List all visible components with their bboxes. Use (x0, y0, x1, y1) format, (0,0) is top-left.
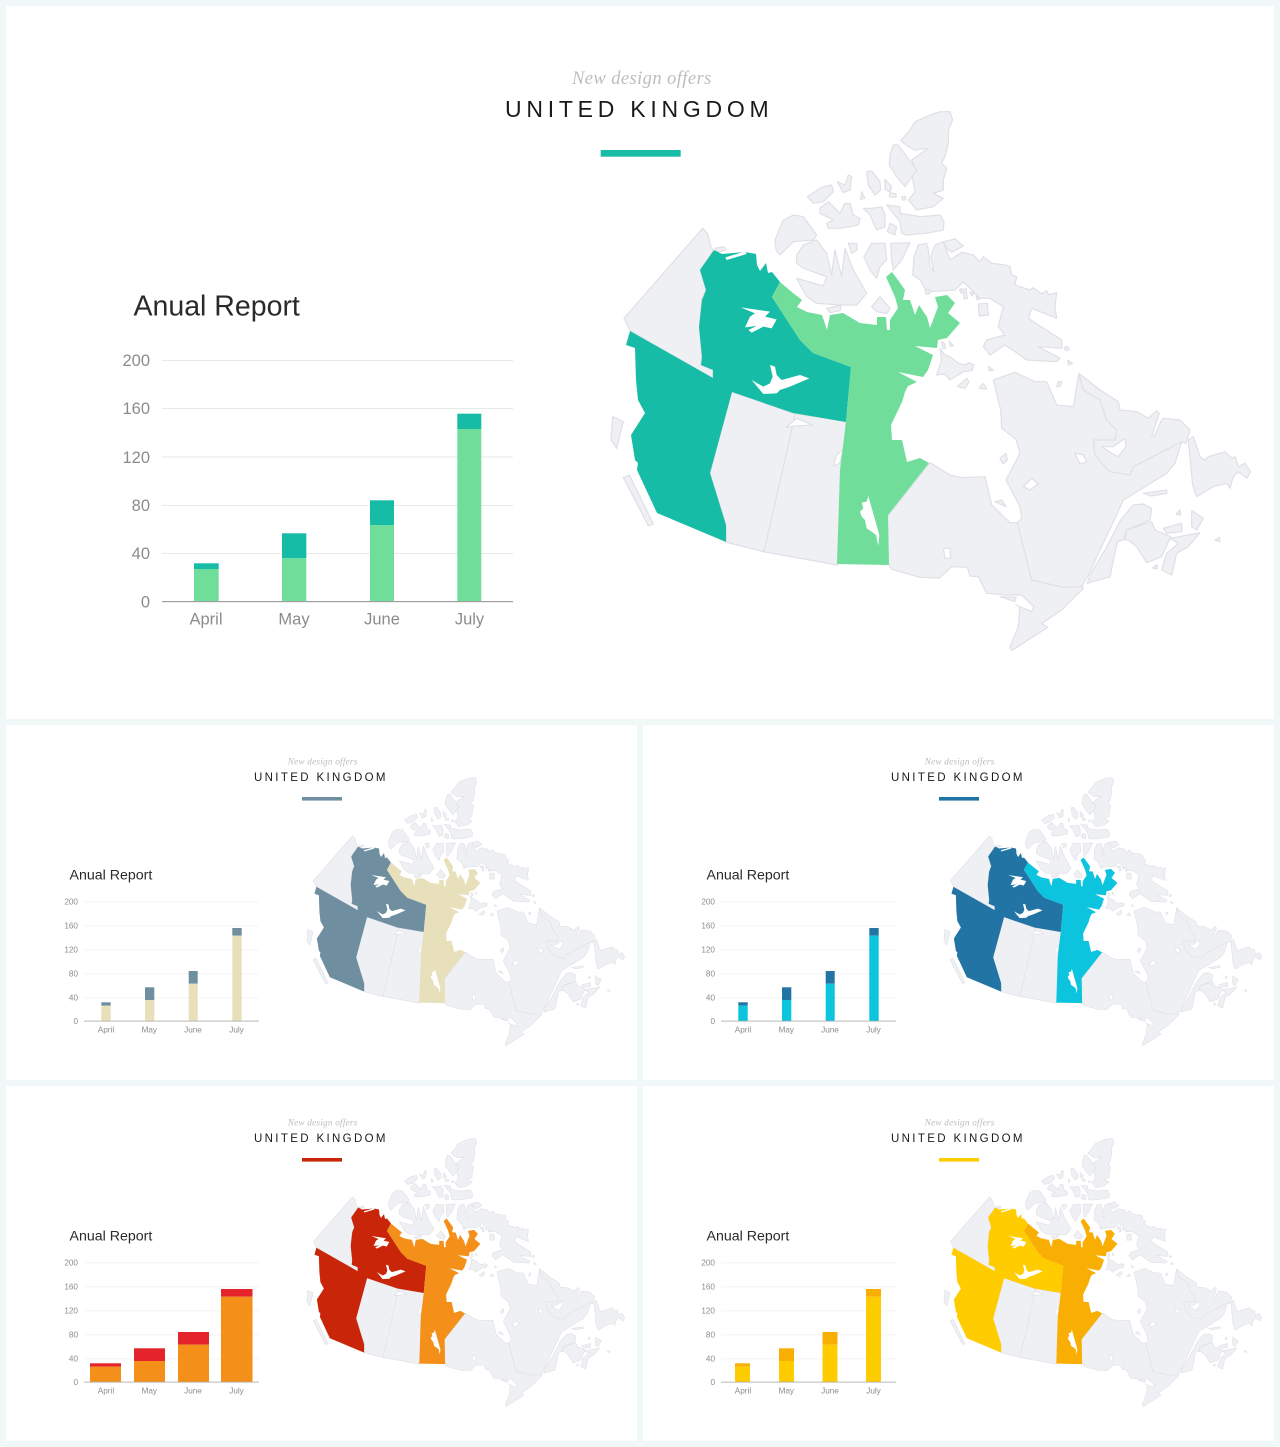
bar chart: 200 (701, 1258, 715, 1268)
title: UNITED KINGDOM (891, 1133, 1025, 1145)
subtitle: New design offers (287, 758, 358, 768)
bar chart: 200 (701, 898, 715, 906)
bar chart: April (189, 610, 223, 628)
bar chart: 200 (122, 352, 150, 370)
bar chart (122, 352, 513, 628)
chart heading: Anual Report (134, 290, 300, 322)
panel: blue and cyan (643, 725, 1274, 1080)
map (944, 778, 1262, 1046)
chart heading: Anual Report (706, 1228, 789, 1244)
bar chart: 80 (706, 1330, 715, 1340)
panel: slate and sand (6, 725, 637, 1080)
bar chart: 200 (64, 1258, 78, 1268)
bar chart: July (866, 1026, 882, 1035)
subtitle: New design offers (571, 69, 712, 89)
subtitle: New design offers (924, 1118, 995, 1128)
chart heading: Anual Report (70, 1228, 152, 1244)
bar chart: 0 (73, 1378, 78, 1387)
bar chart (64, 1258, 259, 1396)
bar chart: April (735, 1387, 751, 1396)
title: UNITED KINGDOM (254, 1133, 388, 1145)
bar chart (64, 898, 259, 1035)
panel: main teal report (6, 6, 1274, 719)
bar chart: 120 (122, 449, 150, 467)
bar chart: 160 (64, 922, 78, 930)
bar chart: 160 (701, 1282, 715, 1292)
bar chart: July (455, 610, 485, 628)
bar chart: June (821, 1026, 839, 1035)
subtitle: New design offers (287, 1118, 358, 1128)
bar chart: 40 (69, 994, 78, 1002)
bar chart (701, 898, 896, 1035)
panel: yellow and amber (643, 1086, 1274, 1441)
bar chart: 40 (132, 545, 150, 563)
map (307, 778, 625, 1046)
title underline (302, 1158, 342, 1162)
map (944, 1139, 1262, 1407)
map of regions, teal and green (611, 112, 1251, 651)
bar chart: June (184, 1026, 202, 1035)
bar chart: April (98, 1026, 114, 1035)
bar chart: May (779, 1387, 795, 1396)
bar chart: 160 (64, 1282, 78, 1292)
subtitle: New design offers (924, 758, 995, 768)
bar chart: 80 (706, 970, 715, 978)
title: UNITED KINGDOM (505, 96, 773, 122)
title underline (939, 797, 979, 801)
bar chart: 80 (132, 497, 150, 515)
bar chart: April (98, 1387, 114, 1396)
bar chart: 0 (710, 1017, 715, 1026)
bar chart: 160 (701, 922, 715, 930)
chart heading: Anual Report (70, 868, 152, 884)
bar chart: 120 (701, 946, 715, 954)
bar chart: 40 (69, 1354, 78, 1364)
bar chart: 0 (73, 1017, 78, 1026)
bar chart: July (229, 1387, 245, 1396)
chart heading: Anual Report (706, 868, 789, 884)
bar chart: June (184, 1387, 202, 1396)
bar chart: 200 (64, 898, 78, 906)
bar chart: May (779, 1026, 795, 1035)
bar chart: 0 (710, 1378, 715, 1387)
bar chart: May (142, 1026, 158, 1035)
bar chart: June (821, 1387, 839, 1396)
bar chart: 120 (64, 946, 78, 954)
bar chart: May (278, 610, 310, 628)
bar chart: 40 (706, 1354, 715, 1364)
bar chart (701, 1258, 896, 1396)
panel: red and orange (6, 1086, 637, 1441)
title: UNITED KINGDOM (254, 772, 388, 784)
bar chart: 80 (69, 970, 78, 978)
title underline (939, 1158, 979, 1162)
bar chart: 0 (141, 594, 150, 612)
bar chart: 120 (701, 1306, 715, 1316)
bar chart: 80 (69, 1330, 78, 1340)
map (307, 1139, 625, 1407)
bar chart: July (866, 1387, 882, 1396)
bar chart: June (364, 610, 400, 628)
bar chart: April (735, 1026, 751, 1035)
title: UNITED KINGDOM (891, 772, 1025, 784)
title underline (302, 797, 342, 801)
bar chart: July (229, 1026, 245, 1035)
title underline (601, 150, 681, 157)
bar chart: 120 (64, 1306, 78, 1316)
bar chart: 40 (706, 994, 715, 1002)
bar chart: 160 (122, 400, 150, 418)
bar chart: May (142, 1387, 158, 1396)
